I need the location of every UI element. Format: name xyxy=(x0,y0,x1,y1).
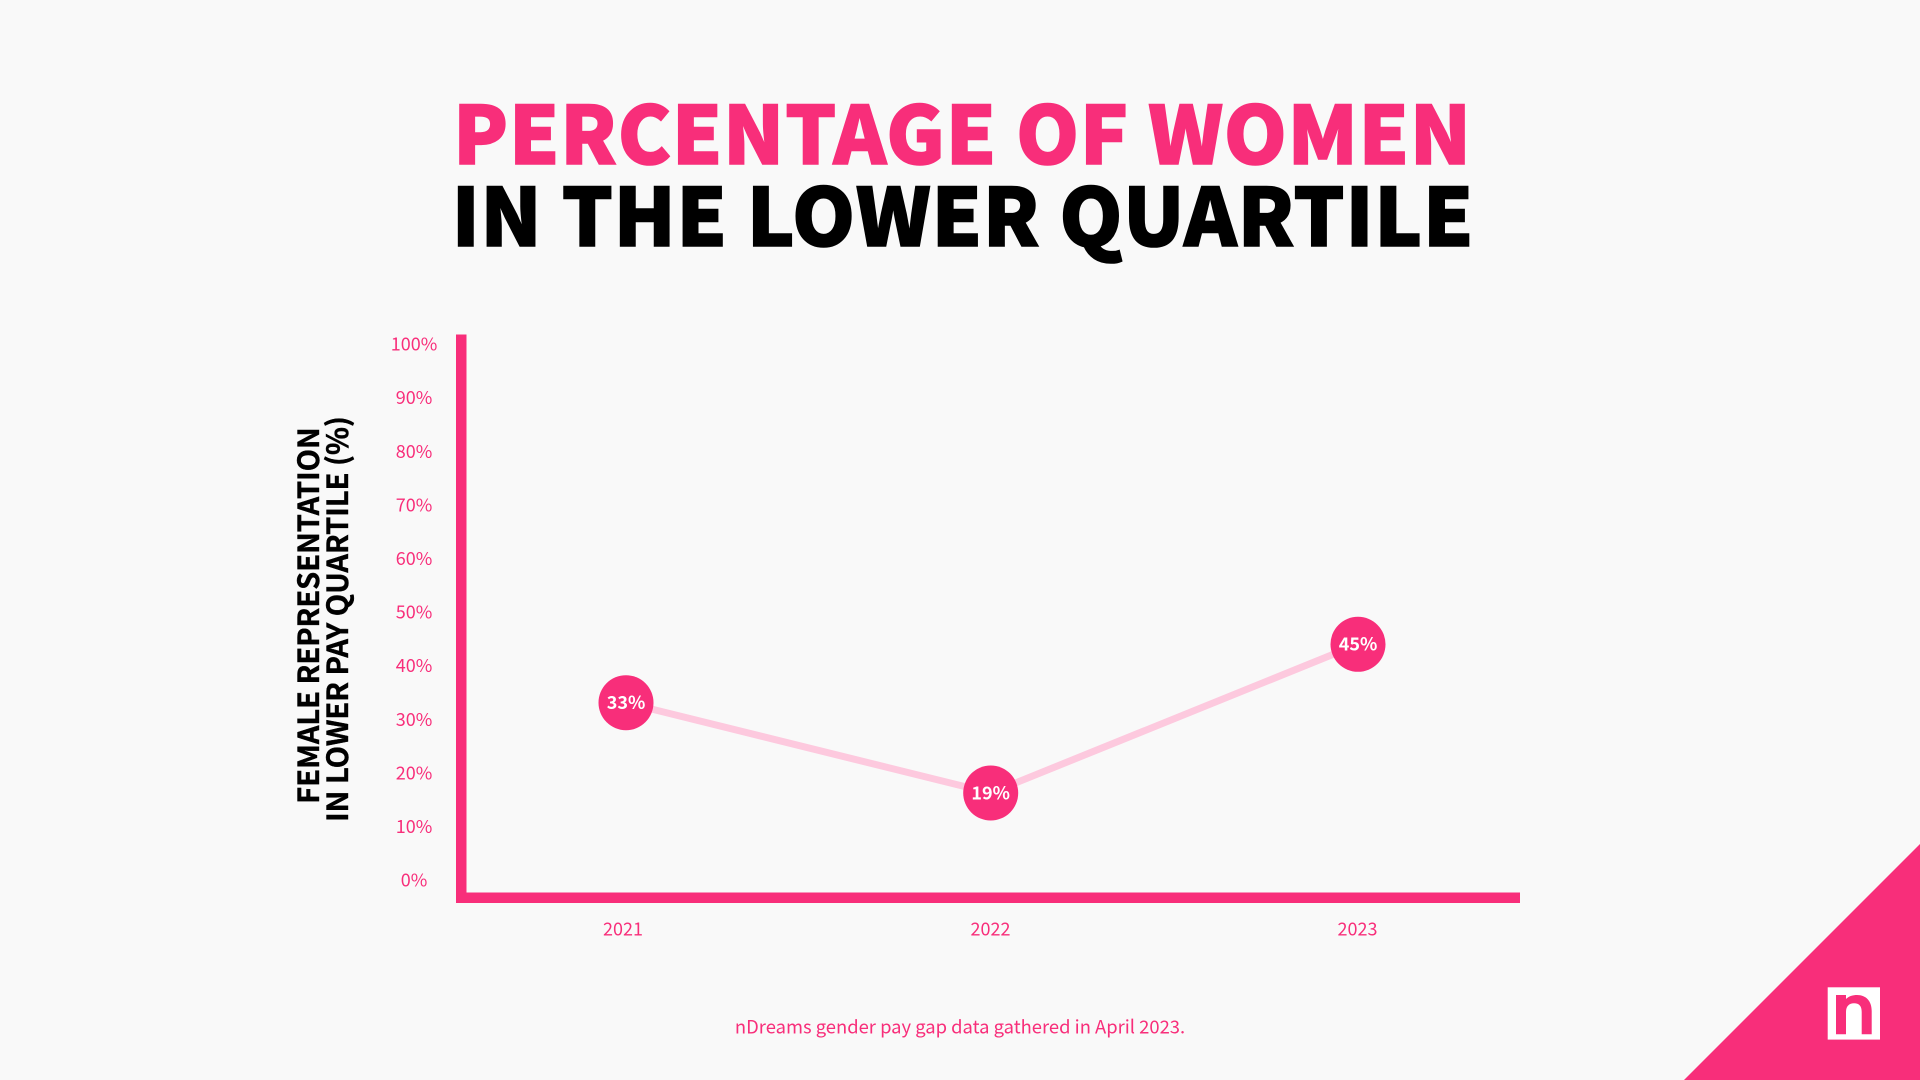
x axis labels: 2022 xyxy=(971,916,1010,942)
data point: 2022 19%: 19% xyxy=(971,780,1010,806)
chart axes xyxy=(456,334,1520,903)
y axis tick labels: 70% xyxy=(396,491,432,517)
title xyxy=(452,72,1474,270)
y axis tick labels: 80% xyxy=(396,438,432,464)
y axis title line 1: FEMALE REPRESENTATION xyxy=(286,427,328,804)
x axis labels: 2023 xyxy=(1338,916,1377,942)
y axis tick labels xyxy=(391,331,437,893)
y axis tick labels: 0% xyxy=(401,867,427,893)
x axis labels xyxy=(603,916,1377,942)
y axis tick labels: 40% xyxy=(396,652,432,678)
y axis tick labels: 10% xyxy=(396,813,432,839)
title line 1: pink: PERCENTAGE OF WOMEN xyxy=(453,72,1472,188)
corner triangle xyxy=(1684,844,1920,1080)
trend line xyxy=(626,644,1358,793)
title line 2: black: IN THE LOWER QUARTILE xyxy=(452,154,1474,270)
y axis tick labels: 30% xyxy=(396,706,432,732)
y axis tick labels: 20% xyxy=(396,759,432,785)
icon: nDreams logo xyxy=(1828,987,1880,1040)
data point: 2023 45%: 45% xyxy=(1339,630,1377,656)
x axis labels: 2021 xyxy=(603,916,643,942)
y axis title xyxy=(286,416,357,822)
data point: 2021 33% xyxy=(598,675,654,730)
y axis tick labels: 60% xyxy=(396,545,432,571)
y axis title line 2: IN LOWER PAY QUARTILE (%) xyxy=(315,416,357,822)
footnote: nDreams gender pay gap data gathered in April 2023. xyxy=(735,1014,1185,1040)
y axis tick labels: 50% xyxy=(396,599,432,625)
y axis tick labels: 90% xyxy=(396,384,432,410)
data point: 2023 45% xyxy=(1330,617,1386,672)
data point: 2021 33%: 33% xyxy=(607,689,645,715)
data point: 2022 19% xyxy=(963,766,1018,820)
y axis tick labels: 100% xyxy=(391,331,437,357)
